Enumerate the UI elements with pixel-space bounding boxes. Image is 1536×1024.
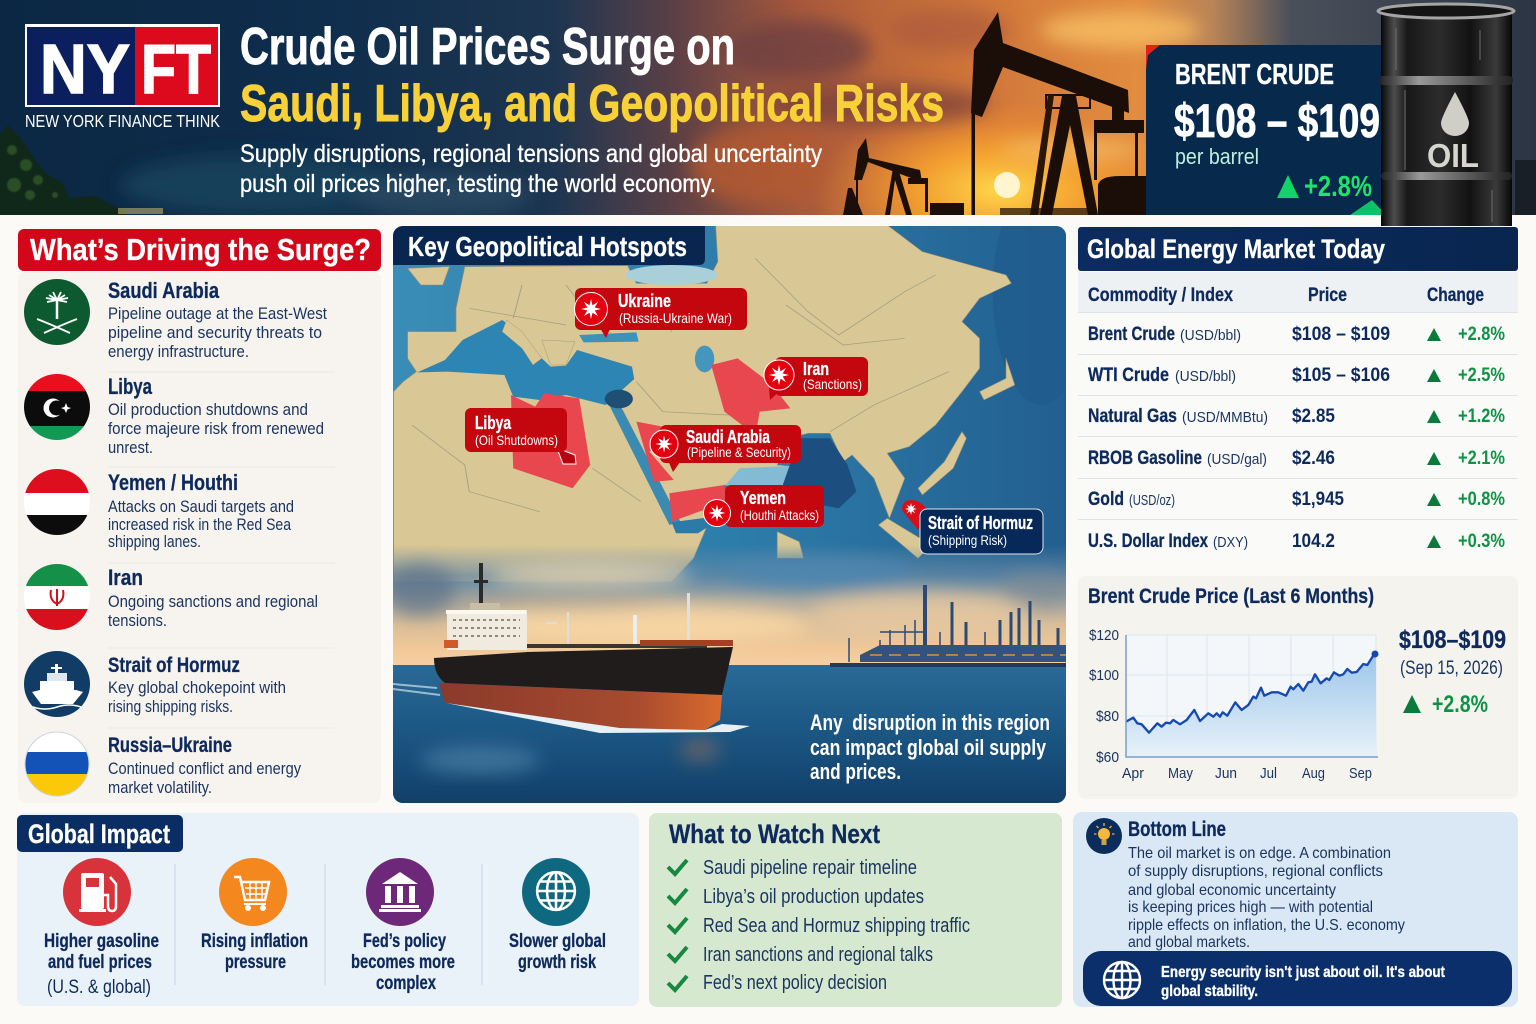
- row: natural gas: +1.2%: [1458, 406, 1505, 427]
- map caption: Any disruption in this region: [810, 710, 1050, 735]
- item: saudi arabia: energy infrastructure.: [108, 343, 249, 361]
- large pump jack: [971, 12, 1146, 215]
- item: libya: [24, 374, 324, 457]
- row: gold: [1088, 488, 1505, 510]
- row: brent crude: [1088, 323, 1505, 345]
- item: iran: Iran: [108, 565, 143, 590]
- row: wti crude: $105 – $106: [1292, 364, 1390, 386]
- row: gold: $1,945: [1292, 488, 1344, 510]
- impact: inflation: pressure: [225, 952, 286, 973]
- heading: global impact: Global Impact: [28, 819, 170, 849]
- title: Saudi, Libya, and Geopolitical Risks: [240, 75, 944, 133]
- brent crude price panel: BRENT CRUDE: [1175, 59, 1334, 91]
- heading: hotspots: [393, 226, 705, 265]
- seas: [417, 265, 856, 533]
- brent crude price panel: +2.8%: [1304, 171, 1372, 203]
- item: libya: Libya: [108, 374, 153, 399]
- item: strait of hormuz: Key global chokepoint with: [108, 679, 286, 697]
- row: rbob gasoline: RBOB Gasoline: [1088, 447, 1202, 469]
- row: gold: (USD/oz): [1129, 492, 1175, 509]
- panel: global energy market table: [1078, 227, 1518, 562]
- line chart: Apr: [1122, 765, 1144, 782]
- panel: geopolitical hotspots map: [393, 226, 1066, 803]
- heading: market: Global Energy Market Today: [1087, 234, 1385, 264]
- table header: Price: [1308, 284, 1347, 306]
- map caption: [810, 710, 1050, 784]
- callout: ukraine: [574, 288, 747, 338]
- row: natural gas: (USD/MMBtu): [1182, 409, 1268, 426]
- row: rbob gasoline: $2.46: [1292, 447, 1335, 469]
- sea: [393, 665, 1066, 803]
- panel: what to watch next: [649, 813, 1062, 1007]
- summary text: and global economic uncertainty: [1128, 882, 1336, 899]
- item: yemen: increased risk in the Red Sea: [108, 516, 292, 534]
- row: rbob gasoline: (USD/gal): [1207, 451, 1267, 468]
- subtitle: [240, 140, 822, 198]
- line chart: Jul: [1260, 765, 1277, 782]
- current price readout: $108–$109: [1399, 626, 1506, 654]
- line chart: May: [1168, 765, 1193, 782]
- row: us dollar index: +0.3%: [1458, 531, 1505, 552]
- item: yemen: Yemen / Houthi: [108, 470, 238, 495]
- row: natural gas: $2.85: [1292, 405, 1335, 427]
- callout: energy security: global stability.: [1161, 983, 1258, 1000]
- heading: hotspots: Key Geopolitical Hotspots: [408, 231, 687, 262]
- item: iran: [24, 564, 318, 631]
- impact: inflation: Rising inflation: [201, 931, 308, 952]
- callout: libya: Libya: [475, 413, 512, 433]
- callout: yemen: Yemen: [740, 488, 786, 508]
- impact: fed policy: Fed’s policy: [363, 931, 446, 952]
- map caption: can impact global oil supply: [810, 735, 1047, 760]
- callout: yemen: (Houthi Attacks): [740, 507, 819, 523]
- sun: [994, 172, 1020, 198]
- subtitle: Supply disruptions, regional tensions and global uncertainty: [240, 140, 822, 168]
- map caption: and prices.: [810, 759, 901, 784]
- checklist: Libya’s oil production updates: [703, 886, 924, 908]
- header banner: [0, 0, 1536, 215]
- table header: Commodity / Index: [1088, 284, 1233, 306]
- row: brent crude: $108 – $109: [1292, 323, 1390, 345]
- callout: iran: [764, 357, 868, 400]
- item: russia-ukraine: market volatility.: [108, 779, 212, 797]
- item: iran: tensions.: [108, 612, 167, 630]
- impact: global growth: Slower global: [509, 931, 606, 952]
- row: wti crude: WTI Crude: [1088, 364, 1169, 386]
- oil drop icon: [1441, 92, 1469, 136]
- brent crude price panel: per barrel: [1175, 144, 1259, 169]
- oil barrel: OIL: [1427, 137, 1479, 174]
- callout: libya: (Oil Shutdowns): [475, 432, 558, 448]
- heading: chart: Brent Crude Price (Last 6 Months): [1088, 585, 1374, 608]
- impact: fed policy: [351, 858, 455, 994]
- summary text: is keeping prices high — with potential: [1128, 899, 1373, 916]
- impact: fed policy: becomes more: [351, 952, 455, 973]
- callout: yemen: [704, 485, 824, 527]
- icon: light bulb: [1086, 818, 1122, 854]
- subtitle: push oil prices higher, testing the world economy.: [240, 170, 716, 198]
- brent crude price panel: [1146, 45, 1386, 215]
- callout: strait of hormuz: [902, 500, 1043, 554]
- callout: strait of hormuz: (Shipping Risk): [928, 532, 1007, 548]
- line chart: Aug: [1302, 765, 1325, 782]
- logo: [25, 24, 220, 131]
- callout: strait of hormuz: Strait of Hormuz: [928, 513, 1033, 533]
- row: natural gas: [1088, 405, 1505, 427]
- callout: libya: [465, 408, 576, 464]
- item: libya: force majeure risk from renewed: [108, 420, 324, 438]
- horizon glow lights: [118, 208, 163, 214]
- summary text: and global markets.: [1128, 934, 1250, 951]
- callout: energy security: [1083, 951, 1512, 1006]
- callout: iran: (Sanctions): [803, 376, 862, 392]
- callout: saudi arabia: Saudi Arabia: [686, 427, 771, 447]
- oil barrel: [1378, 4, 1514, 226]
- impact: global growth: [509, 858, 606, 973]
- table header: [1078, 272, 1518, 312]
- title: [240, 18, 944, 133]
- oil tanker ship: [393, 563, 750, 733]
- row: gold: +0.8%: [1458, 489, 1505, 510]
- panel: brent crude price chart: [1078, 576, 1518, 799]
- item: strait of hormuz: rising shipping risks.: [108, 698, 233, 716]
- panel: what's driving the surge: [18, 229, 381, 803]
- impact: inflation: [201, 858, 308, 973]
- item: yemen: shipping lanes.: [108, 533, 201, 551]
- summary text: of supply disruptions, regional conflicts: [1128, 863, 1383, 880]
- line chart: [1089, 627, 1378, 782]
- line chart: $120: [1089, 627, 1119, 644]
- callout: ukraine: (Russia-Ukraine War): [619, 310, 732, 326]
- item: iran: Ongoing sanctions and regional: [108, 593, 318, 611]
- sky over ship: [393, 545, 1066, 667]
- impact: global growth: growth risk: [518, 952, 596, 973]
- summary text: The oil market is on edge. A combination: [1128, 845, 1391, 862]
- row: gold: Gold: [1088, 488, 1124, 510]
- logo: NEW YORK FINANCE THINK: [25, 111, 220, 131]
- title: Crude Oil Prices Surge on: [240, 18, 735, 76]
- impact: fuel prices: Higher gasoline: [44, 931, 159, 952]
- logo: FT: [141, 30, 211, 108]
- row: natural gas: Natural Gas: [1088, 405, 1177, 427]
- item: strait of hormuz: [24, 651, 286, 717]
- item: saudi arabia: Saudi Arabia: [108, 278, 220, 303]
- item: saudi arabia: Pipeline outage at the East-West: [108, 305, 327, 323]
- callout: saudi arabia: [650, 425, 801, 472]
- refinery: [830, 585, 1066, 667]
- row: brent crude: (USD/bbl): [1180, 327, 1241, 344]
- row: brent crude: Brent Crude: [1088, 323, 1175, 345]
- panel: bottom line: [1073, 812, 1518, 1007]
- row: wti crude: (USD/bbl): [1175, 368, 1236, 385]
- callout: iran: Iran: [803, 359, 829, 379]
- item: russia-ukraine: Continued conflict and energy: [108, 760, 302, 778]
- checklist: Saudi pipeline repair timeline: [703, 857, 917, 879]
- impact: fed policy: complex: [376, 973, 436, 994]
- current price readout: (Sep 15, 2026): [1400, 658, 1503, 679]
- item: libya: Oil production shutdowns and: [108, 401, 308, 419]
- heading: drivers: What’s Driving the Surge?: [30, 232, 371, 267]
- small pump jack: [843, 138, 964, 215]
- callout: saudi arabia: (Pipeline & Security): [687, 444, 791, 460]
- row: rbob gasoline: [1088, 447, 1505, 469]
- item: russia-ukraine: Russia–Ukraine: [108, 734, 232, 757]
- summary text: ripple effects on inflation, the U.S. economy: [1128, 917, 1405, 934]
- map of land and hotspots: [394, 178, 1090, 582]
- item: yemen: Attacks on Saudi targets and: [108, 498, 294, 516]
- panel: global impact: [17, 813, 639, 1006]
- checklist: Iran sanctions and regional talks: [703, 944, 933, 966]
- callout: ukraine: Ukraine: [618, 291, 671, 311]
- logo: NY: [40, 30, 130, 108]
- item: strait of hormuz: Strait of Hormuz: [108, 654, 240, 677]
- impact: fuel prices: [44, 858, 159, 998]
- row: wti crude: [1088, 364, 1505, 386]
- impact: fuel prices: and fuel prices: [48, 952, 152, 973]
- row: us dollar index: U.S. Dollar Index: [1088, 530, 1208, 552]
- heading: global impact: [17, 815, 183, 852]
- line chart: Jun: [1215, 765, 1237, 782]
- table header: Change: [1427, 284, 1484, 306]
- line chart: $80: [1096, 708, 1119, 725]
- row: us dollar index: 104.2: [1292, 530, 1335, 552]
- line chart: $60: [1096, 749, 1119, 766]
- checklist: Red Sea and Hormuz shipping traffic: [703, 915, 970, 937]
- callout: energy security: Energy security isn't just about oil. It's about: [1161, 964, 1446, 981]
- row: us dollar index: [1088, 530, 1505, 552]
- item: saudi arabia: [24, 278, 327, 361]
- row: rbob gasoline: +2.1%: [1458, 448, 1505, 469]
- item: yemen: [24, 469, 294, 551]
- line chart: $100: [1089, 667, 1119, 684]
- line chart: Sep: [1349, 765, 1372, 782]
- current price readout: [1399, 626, 1506, 718]
- item: russia-ukraine: [24, 732, 302, 797]
- summary text: [1128, 845, 1405, 951]
- item: libya: unrest.: [108, 439, 153, 457]
- brent crude price panel: $108 – $109: [1174, 94, 1380, 147]
- row: us dollar index: (DXY): [1213, 534, 1248, 551]
- heading: watch: What to Watch Next: [669, 819, 880, 849]
- checklist: [668, 857, 970, 994]
- heading: bottom line: Bottom Line: [1128, 818, 1226, 841]
- row: brent crude: +2.8%: [1458, 324, 1505, 345]
- item: saudi arabia: pipeline and security threats to: [108, 324, 322, 342]
- current price readout: +2.8%: [1432, 691, 1488, 718]
- trees: [0, 125, 125, 215]
- impact: fuel prices: (U.S. & global): [47, 977, 151, 998]
- checklist: Fed’s next policy decision: [703, 972, 887, 994]
- row: wti crude: +2.5%: [1458, 365, 1505, 386]
